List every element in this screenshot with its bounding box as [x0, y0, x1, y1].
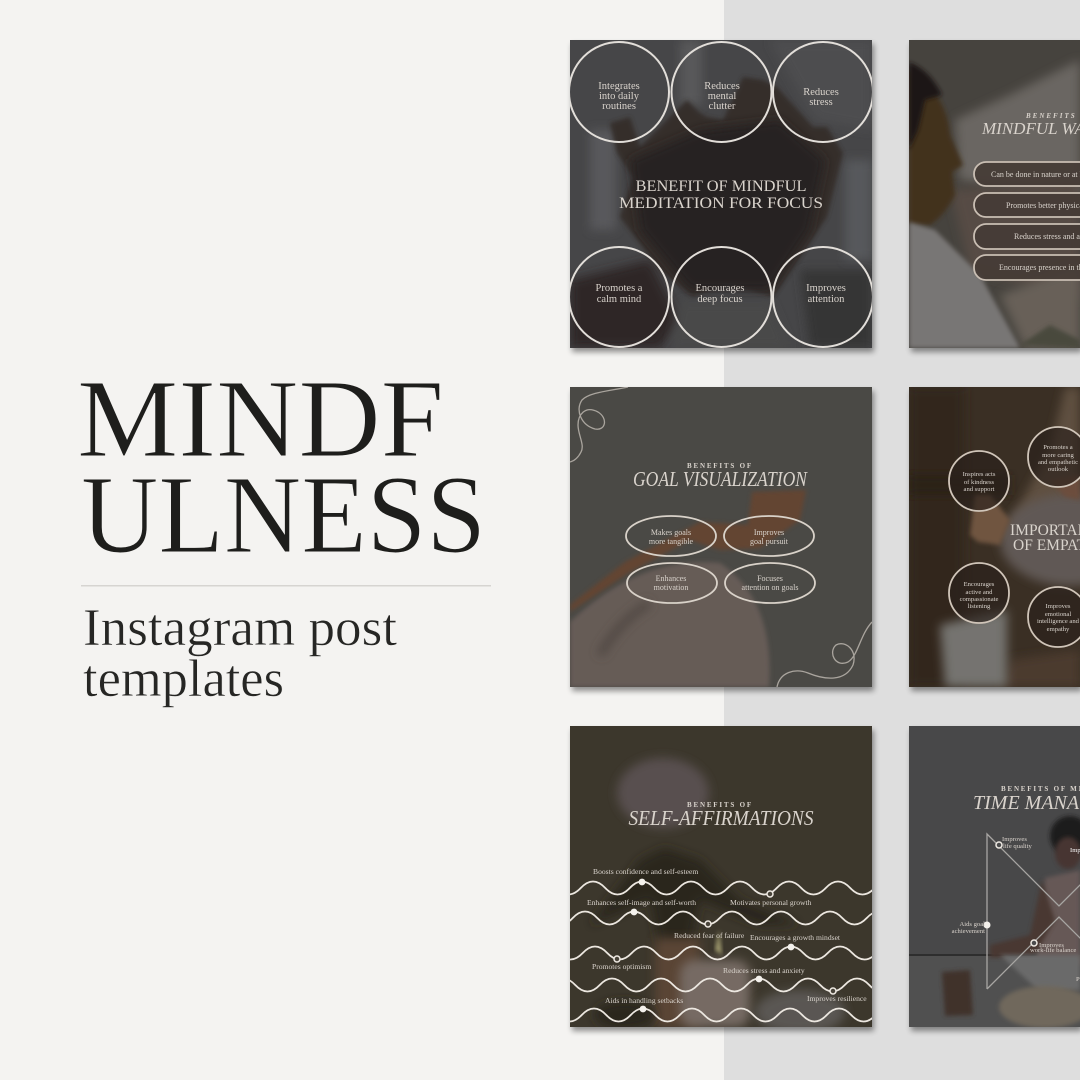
- decorative squiggle: top left: [570, 387, 628, 462]
- title: MINDFULNESS: ULNESS: [81, 454, 486, 577]
- subtitle: Instagram post: [83, 599, 397, 657]
- triangle zigzag lines: [987, 834, 1080, 989]
- wave labels: Promotes optimism: [592, 962, 651, 971]
- wave labels: [587, 867, 867, 1005]
- wave labels: Enhances self-image and self-worth: [587, 898, 696, 907]
- ellipse text: Focuses: [757, 574, 783, 583]
- heading: self-affirmations: [628, 802, 814, 825]
- ellipse text: Enhances: [656, 574, 686, 583]
- circle text: top row: [598, 82, 838, 109]
- circle text: of kindness: [964, 479, 995, 486]
- heading: empathy: [1010, 524, 1080, 550]
- circle text: top row: into daily: [599, 91, 640, 102]
- heading: meditation focus: [620, 180, 822, 208]
- card shadows: [572, 44, 1080, 1031]
- title: MINDFULNESS: MINDF: [77, 358, 444, 481]
- marker labels: Aids goal: [960, 921, 985, 928]
- pill text: [991, 170, 1080, 272]
- ellipse text: [649, 528, 798, 592]
- circle text: Improves: [1046, 603, 1071, 610]
- circle text: top row: clutter: [709, 101, 736, 112]
- circle text: bottom row: attention: [808, 294, 845, 305]
- ellipses: goal benefits: [626, 516, 815, 603]
- circle text: listening: [968, 603, 991, 610]
- circle text: and empathetic: [1038, 459, 1078, 466]
- panel: mindful walking: [909, 40, 1080, 348]
- wave labels: Motivates personal growth: [730, 898, 812, 907]
- circle text: more caring: [1042, 452, 1075, 459]
- heading: meditation focus: BENEFIT OF MINDFUL: [636, 178, 806, 195]
- decorative squiggle: bottom right: [777, 622, 872, 687]
- circle text: bottom row: calm mind: [597, 294, 642, 305]
- wave labels: Improves resilience: [807, 994, 867, 1003]
- panel: self-affirmations: [570, 726, 872, 1027]
- pills: walking benefits: [974, 162, 1080, 280]
- wave labels: Reduced fear of failure: [674, 931, 745, 940]
- circle text: [960, 444, 1080, 633]
- circle text: bottom row: Promotes a: [596, 283, 643, 294]
- circle text: top row: mental: [708, 91, 736, 102]
- circle text: emotional: [1045, 611, 1071, 618]
- heading: goal visualization: BENEFITS OF: [687, 462, 753, 470]
- circle text: compassionate: [960, 596, 998, 603]
- circle text: bottom row: Encourages: [696, 283, 744, 294]
- circles: benefit rings: [569, 42, 873, 347]
- photo: seated meditation: [909, 387, 1080, 687]
- photo: cupped hands: [570, 40, 872, 348]
- circle text: top row: Reduces: [704, 81, 740, 92]
- ellipse text: Improves: [754, 528, 784, 537]
- circle text: top row: Integrates: [598, 81, 640, 92]
- wave labels: Aids in handling setbacks: [605, 996, 683, 1005]
- circle text: Promotes a: [1043, 444, 1073, 451]
- circle text: and support: [964, 486, 995, 493]
- panel: importance of empathy: [909, 387, 1080, 687]
- heading: self-affirmations: SELF-AFFIRMATIONS: [628, 806, 814, 830]
- marker labels: life quality: [1003, 843, 1032, 850]
- ellipse text: goal pursuit: [750, 537, 789, 546]
- wave lines: [570, 880, 872, 1022]
- marker labels: work-life balance: [1030, 947, 1076, 954]
- ellipse text: Makes goals: [651, 528, 691, 537]
- circle text: Inspires acts: [963, 471, 996, 478]
- wave labels: Encourages a growth mindset: [750, 933, 841, 942]
- circles: empathy benefits: [949, 427, 1080, 647]
- circle text: active and: [966, 589, 993, 596]
- markers: [984, 842, 1037, 946]
- panel: mindful time management: [909, 726, 1080, 1028]
- marker labels: Improves: [1039, 942, 1064, 949]
- circle text: top row: Reduces: [803, 87, 839, 98]
- photo: arm on pillow: [570, 490, 806, 687]
- circle text: bottom row: deep focus: [697, 294, 743, 305]
- ellipse text: motivation: [654, 583, 688, 592]
- ellipse text: attention on goals: [742, 583, 798, 592]
- heading: goal visualization: [634, 463, 808, 486]
- circle text: empathy: [1047, 626, 1070, 633]
- divider: [81, 585, 491, 586]
- wave markers: filled: [631, 879, 794, 1012]
- wave labels: Boosts confidence and self-esteem: [593, 867, 698, 876]
- heading: mindful walking: [982, 113, 1080, 134]
- circle text: bottom row: [596, 283, 846, 305]
- circle text: top row: routines: [602, 101, 636, 112]
- marker labels: [952, 836, 1080, 983]
- heading: goal visualization: GOAL VISUALIZATION: [633, 467, 808, 491]
- heading: time management: [974, 786, 1080, 809]
- panel: goal visualization: [570, 387, 872, 687]
- circle text: outlook: [1048, 466, 1069, 473]
- wave labels: Reduces stress and anxiety: [723, 966, 805, 975]
- photo: woman resting: [909, 60, 1080, 348]
- circle text: top row: stress: [809, 97, 833, 108]
- title: MINDFULNESS: [77, 358, 486, 577]
- subtitle: templates: [83, 650, 284, 708]
- circle text: intelligence and: [1037, 618, 1080, 625]
- marker labels: Improves: [1002, 836, 1027, 843]
- photo: flower and candles: [590, 758, 845, 1034]
- circle text: bottom row: Improves: [806, 283, 846, 294]
- circle text: Encourages: [964, 581, 995, 588]
- subtitle: [83, 599, 397, 708]
- marker labels: achievement: [952, 928, 985, 935]
- ellipse text: more tangible: [649, 537, 694, 546]
- heading: meditation focus: MEDITATION FOR FOCUS: [619, 195, 823, 212]
- wave markers: rings: [614, 891, 836, 994]
- panel: mindful meditation for focus: [569, 40, 873, 348]
- photo: woman meditating: [909, 816, 1080, 1028]
- background: grey right band: [724, 0, 1080, 1080]
- heading: self-affirmations: BENEFITS OF: [687, 801, 753, 809]
